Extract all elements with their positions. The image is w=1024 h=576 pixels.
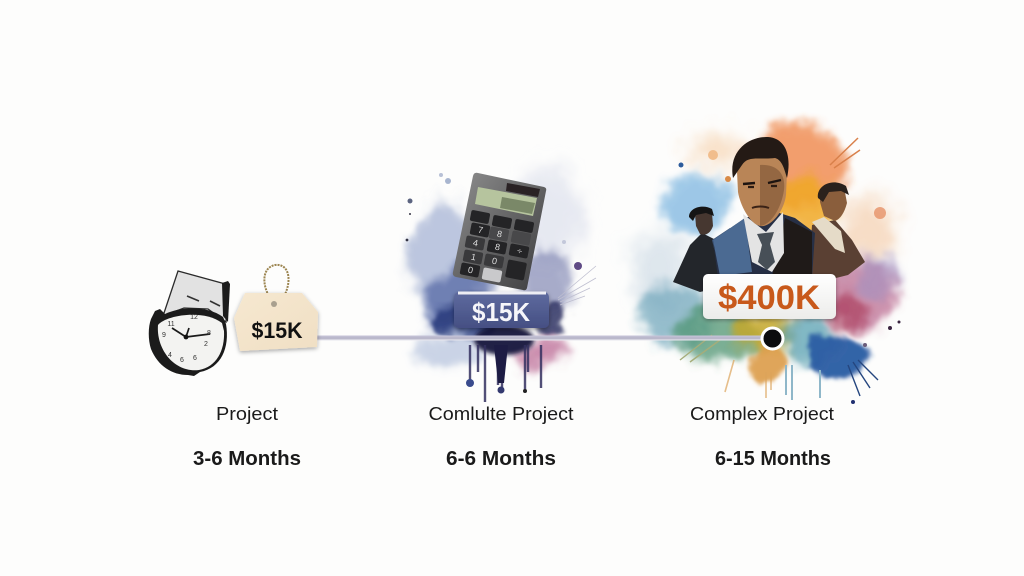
price badge: $400K: $400K — [718, 279, 820, 317]
icon: calculator — [453, 173, 546, 290]
calculator screen — [475, 187, 537, 216]
clock numerals — [162, 314, 211, 364]
splash core — [474, 325, 534, 355]
splash: right watercolor — [632, 123, 900, 404]
icon: broken clock — [149, 271, 230, 376]
clock numerals: 2 — [204, 341, 208, 348]
calculator keys: 8 — [494, 242, 501, 252]
clock face — [158, 315, 224, 370]
label: project 1: Project — [216, 404, 278, 424]
calculator keys: 7 — [477, 225, 484, 235]
calculator keys: 8 — [496, 229, 503, 239]
price badge: $15K: $15K — [472, 297, 530, 327]
calculator keys: ÷ — [516, 246, 523, 256]
clock numerals: 12 — [190, 314, 198, 321]
splash: middle watercolor — [406, 165, 596, 402]
label: project 2 — [428, 404, 574, 470]
clock numerals: 4 — [168, 352, 172, 359]
price badge: $15K — [454, 292, 549, 328]
clock frame — [149, 308, 227, 376]
timeline end marker — [760, 326, 784, 350]
clock back panel — [163, 271, 229, 322]
label: project 3 — [690, 404, 834, 470]
calculator keys — [460, 210, 534, 283]
calculator keys: 1 — [470, 252, 477, 262]
label: project 1: 3-6 Months — [193, 448, 301, 470]
label: project 1 — [193, 404, 301, 470]
tie — [757, 232, 775, 270]
clock numerals: 6 — [180, 357, 184, 364]
portrait: right man — [808, 182, 865, 285]
price tag: $15K — [234, 265, 318, 351]
label: project 3: Complex Project — [690, 404, 834, 424]
hair — [732, 137, 789, 178]
price badge: $400K — [703, 274, 836, 319]
clock hands — [172, 328, 210, 337]
calculator keys: 4 — [472, 238, 479, 248]
label: project 3: 6-15 Months — [715, 448, 831, 470]
portrait: left man — [673, 207, 735, 292]
clock numerals: 8 — [207, 330, 211, 337]
timeline line — [300, 336, 770, 340]
clock numerals: 11 — [167, 321, 175, 328]
label: project 2: 6-6 Months — [446, 448, 556, 470]
clock numerals: 6 — [193, 355, 197, 362]
calculator keys: 0 — [491, 256, 498, 266]
clock numerals: 9 — [162, 332, 166, 339]
face — [737, 156, 787, 226]
calculator keys: 0 — [467, 265, 474, 275]
price tag: $15K: $15K — [252, 318, 303, 343]
portrait: center man — [713, 137, 815, 278]
label: project 2: Comlulte Project — [428, 404, 574, 424]
tag string — [264, 265, 289, 303]
